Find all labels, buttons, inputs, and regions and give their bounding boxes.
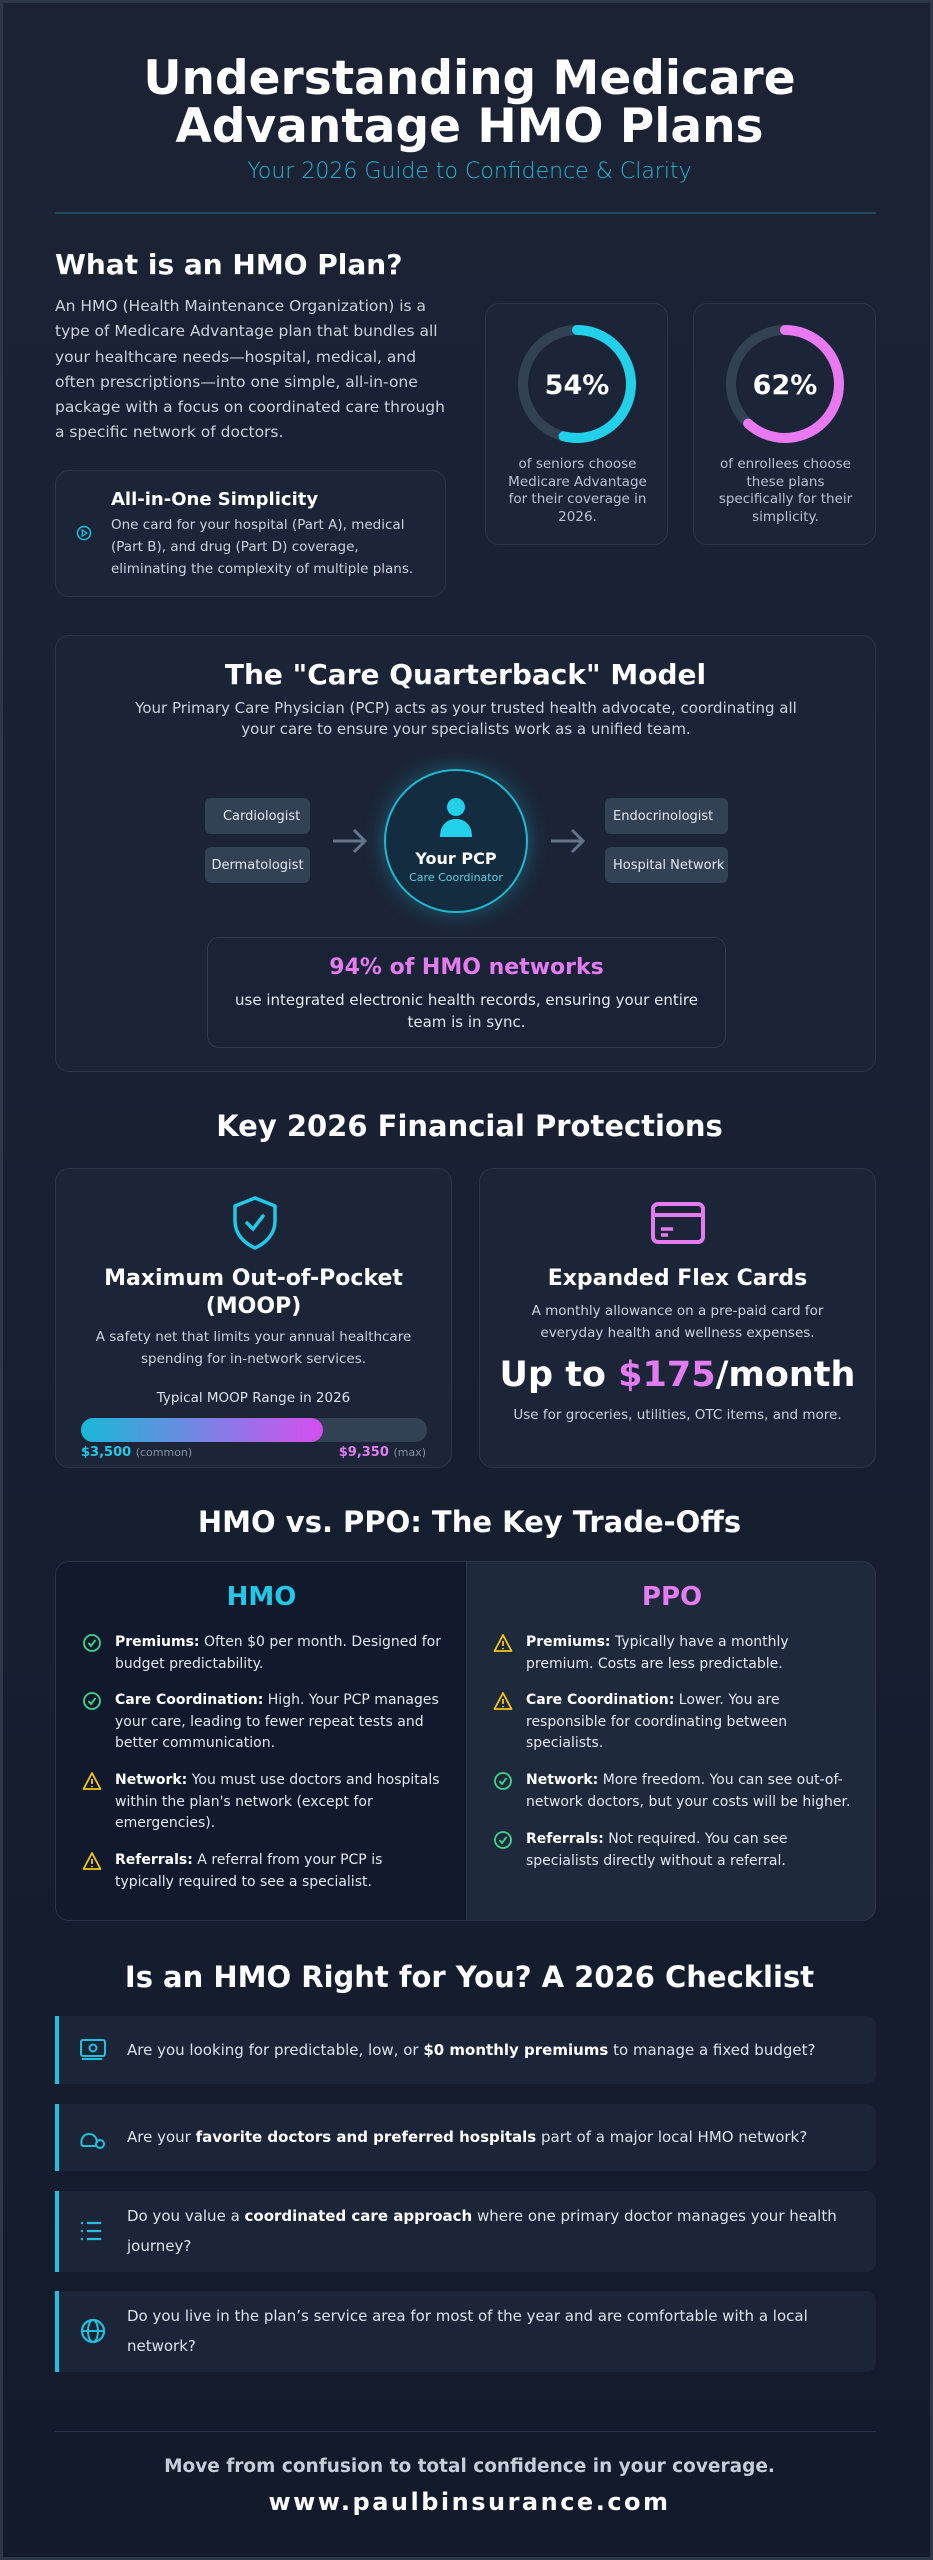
callout: all-in-one simplicity: One card for your hospital (Part A), medical (Part B), and drug (Part D) coverage, eliminating the complexity of multiple plans. — [111, 517, 413, 577]
checklist item: coordinated care — [55, 2191, 876, 2272]
column: PPO: Care Coordination: Lower. You are responsible for coordinating between specialists. — [526, 1692, 787, 1751]
column: PPO: Referrals: Not required. You can see specialists directly without a referral. — [526, 1831, 788, 1868]
callout: all-in-one simplicity: All-in-One Simplicity — [111, 489, 318, 510]
callout: all-in-one simplicity — [55, 470, 446, 597]
donut chart 62%: 62% — [753, 370, 817, 401]
column: HMO: Care Coordination: High. Your PCP manages your care, leading to fewer repeat tests and better communication. — [115, 1692, 439, 1751]
card: flex cards: Use for groceries, utilities, OTC items, and more. — [513, 1407, 842, 1423]
subtitle: Your 2026 Guide to Confidence & Clarity — [247, 159, 692, 184]
card: MOOP: Maximum Out-of-Pocket — [104, 1266, 403, 1291]
donut chart 54% — [518, 325, 636, 443]
icon: globe — [80, 2318, 106, 2344]
icon: play circle — [76, 526, 92, 540]
stat card: 62%: of enrollees choose these plans specifically for their simplicity. — [719, 456, 852, 524]
arrow left — [333, 829, 367, 853]
heading: what is an HMO: What is an HMO Plan? — [55, 248, 402, 281]
callout: 94% — [207, 937, 726, 1048]
title: Understanding Medicare — [143, 51, 796, 106]
icon: stethoscope — [80, 2133, 105, 2149]
checklist item: premiums — [55, 2016, 876, 2084]
footer url: www.paulbinsurance.com — [268, 2488, 671, 2516]
column: HMO: Network: You must use doctors and hospitals within the plan's network (except for emergencies). — [115, 1772, 440, 1831]
table: comparison — [55, 1561, 876, 1921]
card: MOOP: (MOOP) — [206, 1294, 301, 1319]
icon: money — [80, 2039, 106, 2060]
card: flex cards — [479, 1168, 876, 1468]
text: HMO description: An HMO (Health Maintenance Organization) is a type of Medicare Advantage plan that bundles all your healthcare needs—hospital, medical, and often prescriptions—into one simple, all-in-one package with a focus on coordinated care through a specific network of doctors. — [55, 297, 445, 441]
heading: HMO vs PPO: HMO vs. PPO: The Key Trade-Offs — [198, 1505, 741, 1539]
donut chart 54%: 54% — [545, 370, 609, 401]
text: PCP description: Your Primary Care Physician (PCP) acts as your trusted health advocate, coordinating all your care to ensure your specialists work as a unified team. — [135, 699, 797, 738]
heading: The "Care Quarterback" Model — [225, 658, 706, 691]
column: PPO: PPO — [642, 1582, 702, 1612]
icon: shield — [233, 1196, 277, 1250]
checklist item: coordinated care: Do you value a coordinated care approach where one primary doctor manages your health journey? — [127, 2207, 837, 2255]
icon: PCP circle: Care Coordinator — [409, 871, 503, 884]
stat card: 54%: of seniors choose Medicare Advantage for their coverage in 2026. — [508, 456, 647, 524]
card: flex cards: A monthly allowance on a pre-paid card for everyday health and wellness expenses. — [532, 1303, 823, 1341]
card: MOOP: $9,350 (max) — [339, 1445, 426, 1460]
bar: MOOP range — [81, 1418, 427, 1442]
column: HMO: HMO — [227, 1582, 296, 1612]
icon: PCP circle: Your PCP — [415, 849, 497, 868]
arrow right — [551, 829, 585, 853]
checklist item: premiums: Are you looking for predictable, low, or $0 monthly premiums to manage a fixed budget? — [127, 2041, 815, 2059]
stat card: 62% — [693, 303, 876, 545]
diagram: PCP network: Endocrinologist — [613, 808, 713, 824]
callout: 94%: use integrated electronic health records, ensuring your entire team is in sync. — [235, 991, 698, 1031]
checklist item: doctors — [55, 2104, 876, 2171]
stat card: 54% — [485, 303, 668, 545]
heading: financial protections: Key 2026 Financial Protections — [216, 1109, 723, 1143]
title — [143, 51, 796, 154]
donut chart 62% — [726, 325, 844, 443]
card: MOOP — [55, 1168, 452, 1468]
card: flex cards: Expanded Flex Cards — [548, 1266, 807, 1291]
icon: list — [81, 2222, 101, 2240]
footer tagline: Move from confusion to total confidence in your coverage. — [164, 2456, 775, 2477]
diagram: PCP network: Cardiologist — [223, 808, 300, 824]
heading: checklist: Is an HMO Right for You? A 2026 Checklist — [125, 1960, 814, 1994]
card: flex cards: Up to $175/month — [500, 1355, 855, 1395]
card: MOOP: A safety net that limits your annual healthcare spending for in-network services. — [96, 1329, 411, 1367]
icon: PCP circle — [384, 769, 528, 913]
diagram: PCP network — [205, 758, 728, 924]
diagram: PCP network: Hospital Network — [613, 858, 724, 872]
checklist item: service area: Do you live in the plan’s service area for most of the year and are comfortable with a local network? — [127, 2307, 808, 2355]
column: PPO: Network: More freedom. You can see out-of-network doctors, but your costs will be higher. — [526, 1772, 850, 1810]
column: HMO: Referrals: A referral from your PCP is typically required to see a specialist. — [115, 1852, 382, 1890]
title: Advantage HMO Plans — [175, 99, 764, 154]
card: MOOP: Typical MOOP Range in 2026 — [157, 1390, 350, 1406]
column: PPO — [494, 1582, 850, 1868]
diagram: PCP network: Dermatologist — [211, 858, 304, 872]
column: PPO: Premiums: Typically have a monthly premium. Costs are less predictable. — [526, 1634, 789, 1672]
callout: 94%: 94% of HMO networks — [329, 955, 604, 980]
checklist item: doctors: Are your favorite doctors and preferred hospitals part of a major local HMO network? — [127, 2128, 807, 2146]
icon: credit card — [651, 1202, 705, 1244]
panel: care quarterback — [55, 635, 876, 1072]
column: HMO: Premiums: Often $0 per month. Designed for budget predictability. — [115, 1634, 441, 1672]
checklist item: service area — [55, 2291, 876, 2372]
card: MOOP: $3,500 (common) — [81, 1445, 192, 1460]
column: HMO — [56, 1562, 467, 1922]
